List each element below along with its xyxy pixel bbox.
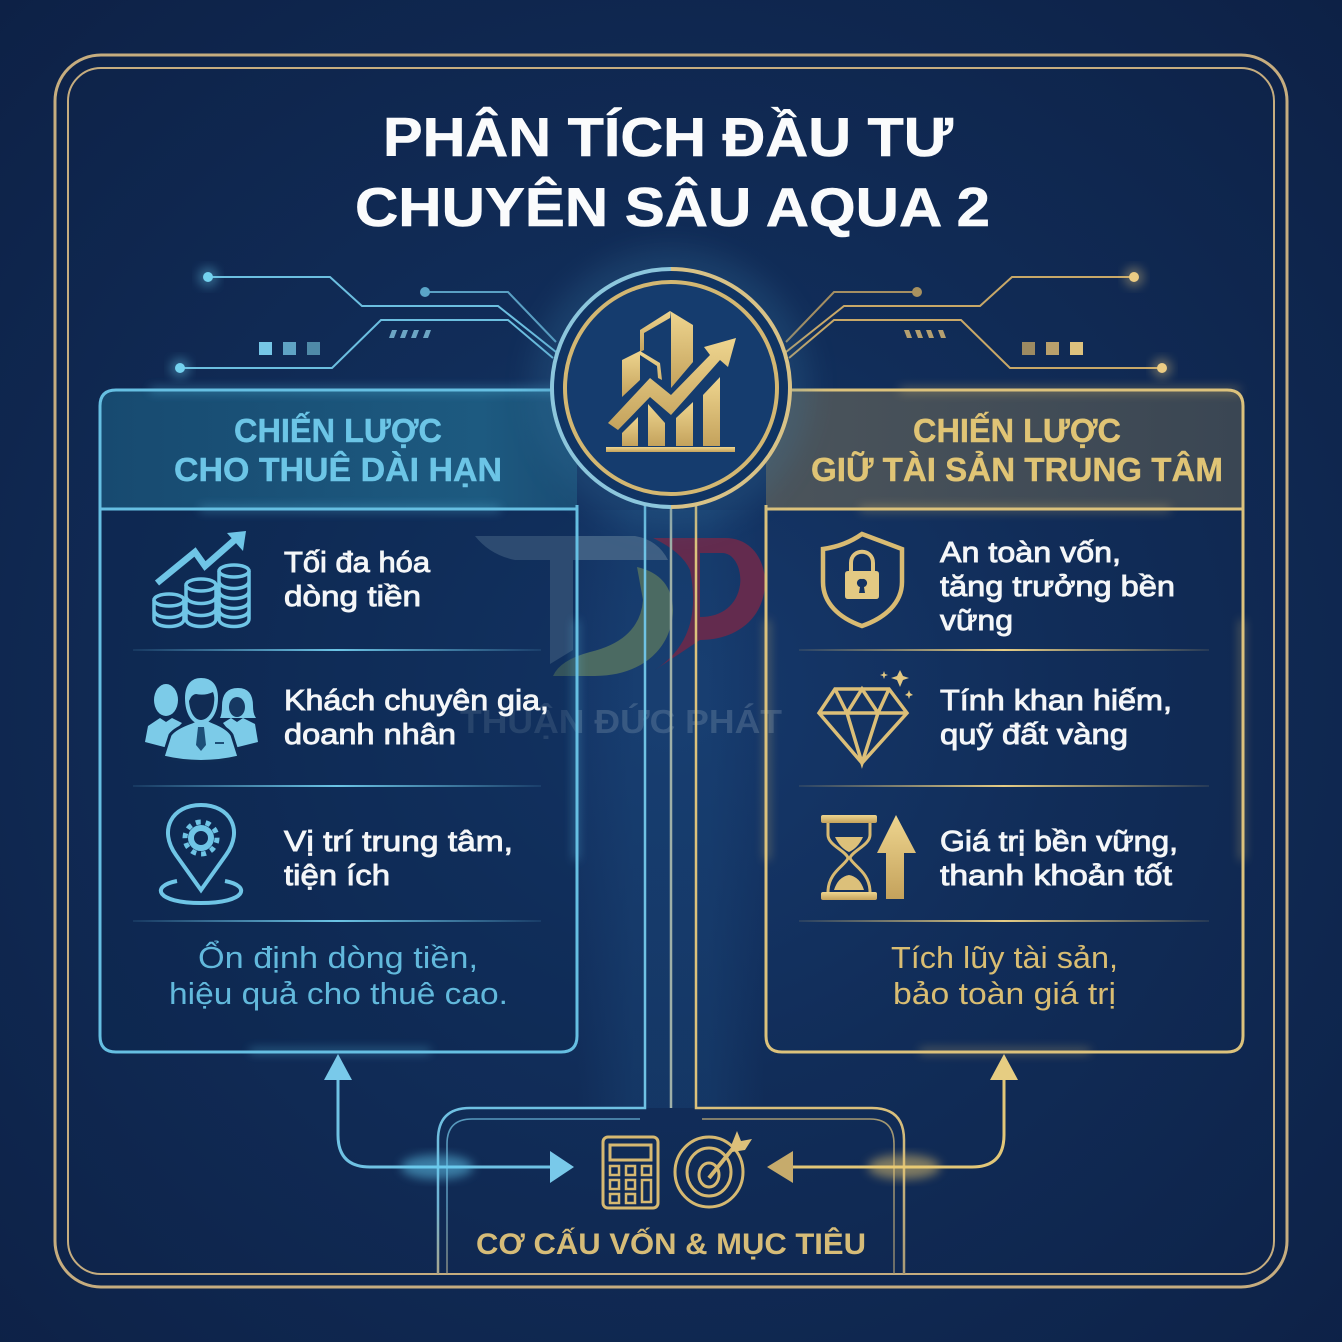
footer text: rental [169,939,508,1011]
item: capital safety: vững [940,605,1013,637]
icon: people [145,678,258,762]
item: capital safety [940,537,1175,637]
icon: calculator [603,1137,658,1208]
item: capital safety: An toàn vốn, [940,537,1121,569]
icon: coins and rising arrow [154,531,249,626]
item: lasting value [940,826,1178,892]
item: maximise cash flow: dòng tiền [284,581,421,613]
icon: diamond with sparkles [819,670,913,763]
arrow: right panel to capital box [767,1054,1018,1183]
panel: long-term rental strategy [100,390,577,1052]
item: scarcity: quỹ đất vàng [940,719,1128,751]
item: central location: tiện ích [284,860,390,892]
circuit lines right [786,267,1172,378]
footer text: rental: hiệu quả cho thuê cao. [169,976,508,1011]
title: CHUYÊN SÂU AQUA 2 [355,176,990,238]
item: scarcity [940,685,1172,751]
footer text: holding: Tích lũy tài sản, [891,940,1118,975]
footer text: holding [891,940,1118,1011]
icon: buildings and rising arrow [606,311,736,452]
heading: rental: CHO THUÊ DÀI HẠN [174,451,502,488]
item: lasting value: thanh khoản tốt [940,860,1172,892]
dividers [799,649,1209,922]
item: scarcity: Tính khan hiếm, [940,685,1172,717]
footer text: rental: Ổn định dòng tiền, [198,939,478,975]
centre strip glow [578,510,764,1108]
caption: capital structure and goals: CƠ CẤU VỐN & MỤC TIÊU [476,1227,866,1261]
item: central location [284,826,513,892]
footer text: holding: bảo toàn giá trị [893,976,1116,1011]
item: lasting value: Giá trị bền vững, [940,826,1178,858]
watermark logo [475,536,765,676]
heading: holding [811,412,1223,488]
circuit lines left [170,267,556,378]
heading: rental [174,412,502,488]
heading: holding: GIỮ TÀI SẢN TRUNG TÂM [811,451,1223,488]
title [355,106,990,238]
title: PHÂN TÍCH ĐẦU TƯ [383,106,953,168]
heading: holding: CHIẾN LƯỢC [913,412,1121,449]
connector lines from centre to bottom box [438,505,904,1274]
item: central location: Vị trí trung tâm, [284,826,513,858]
heading: rental: CHIẾN LƯỢC [234,412,442,449]
central emblem [531,248,811,528]
watermark text: THUẬN ĐỨC PHÁT [460,703,782,740]
arrow: left panel to capital box [324,1054,574,1183]
item: maximise cash flow [284,547,431,613]
icon: shield with padlock [823,534,902,626]
item: maximise cash flow: Tối đa hóa [284,547,431,579]
item: capital safety: tăng trưởng bền [940,571,1175,603]
panel: core asset holding strategy [766,390,1243,1052]
icon: target with dart [675,1131,752,1207]
icon: location pin with gear [161,805,241,903]
dividers [133,649,541,922]
item: professional tenants: doanh nhân [284,719,456,751]
item: professional tenants: Khách chuyên gia, [284,685,549,717]
item: professional tenants [284,685,549,751]
icon: hourglass and up arrow [821,815,916,900]
